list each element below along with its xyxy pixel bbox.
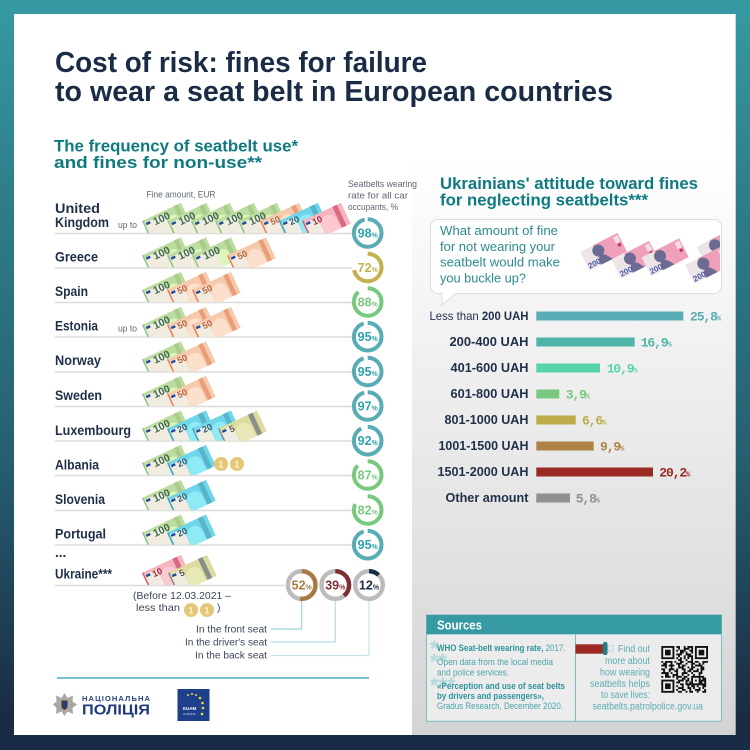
sources list: by drivers and passengers», [437,691,544,701]
country names: Norway [55,353,101,368]
panel: right gradient [412,14,736,735]
heading: Ukrainians' attitude [440,175,698,210]
banknotes: Slovenia: 20 [176,491,189,504]
find out more text [590,644,703,712]
bar: 200-400 UAH: 200-400 UAH [450,335,528,349]
bar: 601-800 UAH: 601-800 UAH [450,387,528,401]
bar: less than 200 UAH [430,309,722,324]
bar: 1001-1500 UAH [438,439,625,454]
question text: you buckle up? [440,271,526,286]
sources list: Gradus Research, December 2020. [437,701,563,711]
icon: 200 hryvnia notes: 200 [692,269,708,284]
banknotes: United Kingdom: 100 [177,210,198,228]
panel: left white [14,14,412,735]
question text: seatbelt would make [440,255,560,270]
panel: sources [426,615,722,721]
title [55,47,613,108]
connector lines: Ukraine seats [271,600,369,656]
donut: Albania 87%: 87% [358,468,379,482]
note: Ukraine fine before 12.03.2021: ) [217,602,220,614]
banknotes: Estonia [142,307,241,337]
icon: seat belt strap [576,642,613,655]
bar: 1501-2000 UAH: 20,2% [659,466,691,480]
donut: Ukraine driver's seat 39% [322,571,349,599]
donut: Sweden 97%: 97% [358,400,379,414]
banknotes: Portugal: 20 [176,526,189,539]
banknotes: Slovenia [142,480,216,510]
note: Ukraine fine before 12.03.2021: (Before 12.03.2021 – [133,590,231,602]
banknotes: Spain [142,272,241,302]
country names: Sweden [55,388,102,403]
logo: national police: ПОЛІЦІЯ [82,702,150,718]
donut: Ukraine back seat 12% [355,571,383,599]
divider [57,677,369,679]
donut: Ukraine driver's seat 39%: 39% [325,578,346,592]
coins: Albania: 1 [218,460,224,470]
donut: Estonia 95%: 95% [358,330,379,344]
icon: 200 hryvnia notes [580,232,720,284]
donut: Sweden 97% [354,392,382,420]
label: wearing rate axis: Seatbelts wearing [348,179,417,190]
banknotes: United Kingdom: 100 [247,210,268,228]
country names: Slovenia [55,492,105,507]
banknotes: Spain: 100 [151,279,172,297]
find out more text: more about [605,656,650,667]
icon: 200 hryvnia notes: 200 [587,256,603,271]
coins: Albania [214,457,244,471]
find out more text: seatbelts.patrolpolice.gov.ua [592,702,703,712]
logo: EUAM Ukraine [178,689,210,721]
bar: 200-400 UAH [450,335,673,350]
sources list: and police services. [437,668,509,678]
country names: Kingdom [55,215,109,230]
sources header [426,615,722,634]
row rules [55,234,352,586]
banknotes: Ukraine: 5 [177,568,186,579]
banknotes: Luxembourg: 5 [227,423,236,434]
banknotes: United Kingdom: 100 [151,210,172,228]
bar: other amount: 5,8% [576,492,601,506]
note: Ukraine fine before 12.03.2021: less than [136,602,180,614]
heading: frequency of seatbelt use: and fines for non-use** [54,154,263,172]
sources list: «Perception and use of seat belts [437,681,565,691]
bar: 1001-1500 UAH: 9,9% [600,440,625,454]
country names: Portugal [55,526,106,541]
banknotes: United Kingdom: 100 [200,210,221,228]
donut: Estonia 95% [354,323,382,351]
banknotes: Portugal [142,514,216,545]
banknotes: United Kingdom: 100 [224,210,245,228]
heading: frequency of seatbelt use: The frequency of seatbelt use* [54,138,299,156]
banknotes: Norway [142,342,216,372]
sources list: * [430,636,439,661]
logo: national police: НАЦІОНАЛЬНА [82,694,151,703]
sources list: ** [430,649,448,674]
bar: less than 200 UAH: 25,8% [690,310,722,324]
bar: 601-800 UAH: 3,9% [566,388,591,402]
donut: Greece 72%: 72% [358,261,379,275]
donut: Greece 72% [354,254,382,281]
question text [440,223,560,286]
bar: 1001-1500 UAH: 1001-1500 UAH [438,439,528,453]
donut: United Kingdom 98% [354,219,382,247]
bar: 801-1000 UAH: 801-1000 UAH [444,413,528,427]
bar: less than 200 UAH: Less than 200 UAH [430,309,528,323]
donut: Portugal 95%: 95% [358,538,379,552]
sources list: *** [430,673,456,698]
sources list [430,636,566,711]
banknotes: Estonia: 100 [151,314,172,332]
country names: Albania [55,457,99,472]
bar chart: fine amounts [430,309,722,506]
label: up to: up to [118,220,137,231]
speech bubble [430,220,744,305]
country names: Luxembourg [55,423,131,438]
banknotes: Estonia: 50 [176,318,189,331]
label: wearing rate axis: rate for all car [348,190,408,202]
label: fine amount axis: Fine amount, EUR [146,190,216,200]
banknotes: Greece [142,238,276,268]
banknotes: Greece: 100 [201,244,222,263]
banknotes: Albania: 100 [151,452,172,470]
donut: Ukraine back seat 12%: 12% [359,578,380,592]
banknotes: Albania [142,444,214,475]
seat labels [185,624,267,662]
seat labels: In the driver's seat [185,636,267,648]
heading: Ukrainians' attitude: Ukrainians' attitude toward fines [440,175,698,193]
country names: Spain [55,284,88,299]
icon: 200 hryvnia notes: 200 [703,251,720,265]
banknotes: United Kingdom: 50 [269,214,282,227]
logo: national police [53,693,151,718]
banknotes: Greece: 100 [151,244,172,263]
banknotes: Sweden: 100 [151,383,172,401]
seat labels: In the back seat [195,650,267,662]
bar: 601-800 UAH [450,387,591,402]
banknotes: Luxembourg [142,410,267,441]
banknotes: Luxembourg: 100 [151,417,172,436]
bar: 1501-2000 UAH [438,465,691,480]
donut: Slovenia 82% [354,496,382,524]
logo: EUAM Ukraine: UKRAINE [183,712,196,716]
banknotes: Greece: 50 [236,248,249,262]
icon: 200 hryvnia notes: 200 [618,264,635,279]
country names [55,201,131,582]
banknotes: United Kingdom: 10 [311,214,324,227]
banknotes: Luxembourg: 20 [176,422,189,435]
logo: EUAM Ukraine: EUAM [183,706,197,711]
label: up to [118,220,137,334]
donut: Norway 95% [354,358,382,385]
bar: 801-1000 UAH: 6,6% [582,414,607,428]
donut: Portugal 95% [354,531,382,558]
banknotes: United Kingdom: 20 [288,214,301,227]
banknotes: Ukraine [142,555,217,585]
donut: Ukraine front seat 52% [288,571,316,599]
heading: frequency of seatbelt use [54,138,299,172]
bar: 401-600 UAH: 401-600 UAH [450,361,528,375]
bar: other amount: Other amount [446,491,529,505]
note: Ukraine fine before 12.03.2021: 1 [188,606,194,616]
banknotes: Spain: 50 [201,283,214,296]
donut: Luxembourg 92% [354,427,382,455]
donut: Norway 95%: 95% [358,365,379,379]
question text: for not wearing your [440,239,556,254]
donut: Ukraine front seat 52%: 52% [292,578,313,592]
icon: 200 hryvnia notes: 200 [648,262,665,276]
bar: 200-400 UAH: 16,9% [641,336,673,350]
donut: Slovenia 82%: 82% [358,504,379,518]
coins: Albania: 1 [234,460,240,470]
country names: Ukraine*** [55,567,113,582]
banknotes: Estonia: 50 [201,318,214,331]
country names: ... [55,545,66,560]
country names: Estonia [55,319,98,334]
bar: 1501-2000 UAH: 1501-2000 UAH [438,465,528,479]
banknotes: Norway: 100 [151,348,172,367]
donut: Albania 87% [354,461,382,489]
find out more text: to save lives: [601,690,650,701]
donut: Spain 88%: 88% [358,296,379,310]
heading: Ukrainians' attitude: for neglecting seatbelts*** [440,192,649,210]
find out more text: Find out [618,644,650,655]
note: Ukraine fine before 12.03.2021 [133,590,231,617]
find out more text: seatbelts helps [590,679,650,690]
country names: Greece [55,250,98,265]
title: to wear a seat belt in European countries [55,76,613,108]
question text: What amount of fine [440,223,558,238]
label: wearing rate axis [348,179,417,213]
banknotes: Greece: 100 [176,244,197,263]
banknotes: Ukraine: 10 [151,566,164,579]
country names: United [55,201,100,216]
banknotes: Norway: 50 [176,352,189,366]
bar: 401-600 UAH [450,361,639,376]
banknotes: Sweden: 50 [176,387,189,400]
sources divider [575,634,576,721]
note: Ukraine fine before 12.03.2021: 1 [204,606,210,616]
donut: Luxembourg 92%: 92% [358,434,379,448]
banknotes: Portugal: 100 [151,521,172,540]
label: up to: up to [118,324,137,334]
title: Cost of risk: fines for failure [55,47,427,79]
seat labels: In the front seat [196,624,267,636]
bar: other amount [446,491,601,506]
banknotes: Slovenia: 100 [151,487,172,505]
banknotes: Luxembourg: 20 [201,422,214,435]
banknotes: United Kingdom [142,202,350,233]
find out more text: how wearing [600,668,650,678]
donut: Spain 88% [354,288,382,316]
label: wearing rate axis: occupants, % [348,202,398,213]
banknotes: Sweden [142,376,216,406]
sources list: Open data from the local media [437,657,553,667]
QR code [661,646,708,693]
sources title: Sources [437,618,482,632]
sources list: WHO Seat-belt wearing rate, 2017. [437,643,566,653]
banknotes: Spain: 50 [176,283,189,296]
banknotes: Albania: 20 [176,456,189,469]
bar: 801-1000 UAH [444,413,607,428]
bar: 401-600 UAH: 10,9% [607,362,639,376]
donut: United Kingdom 98%: 98% [358,226,379,240]
